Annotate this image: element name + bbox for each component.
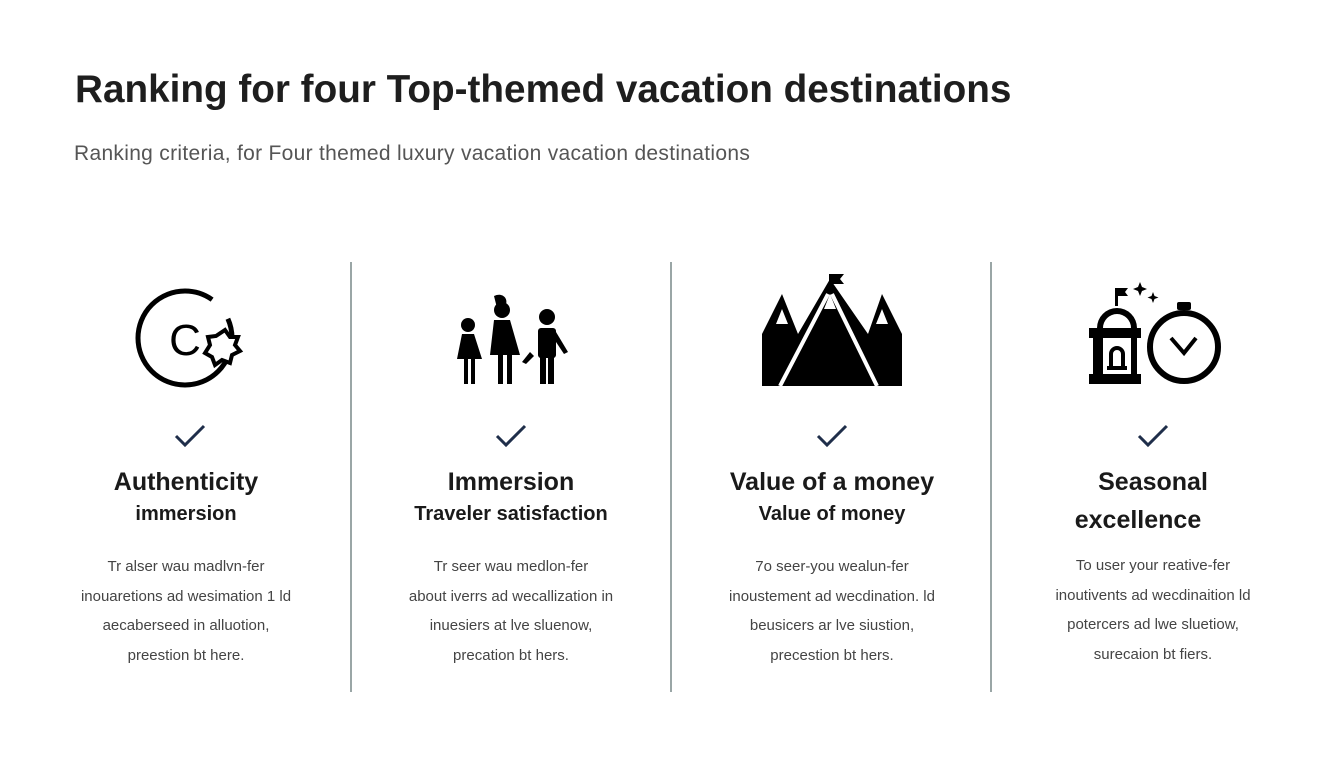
panel: authenticity: immersion [135,503,237,525]
panel: seasonal: inoutivents ad wecdinaition ld [1055,586,1251,604]
panel: immersion: Traveler satisfaction [414,503,608,525]
panel: seasonal: To user your reative-fer [1076,557,1230,574]
panel: authenticity [81,468,291,664]
panel: seasonal: Seasonal [1098,468,1208,496]
panel: value: precestion bt hers. [770,646,894,664]
panel: value: Value of money [759,503,905,525]
panel: authenticity: preestion bt here. [128,646,244,664]
panel: authenticity: Authenticity [114,468,258,496]
panel: immersion: Tr seer wau medlon-fer [434,558,588,575]
panel: immersion: about iverrs ad wecallization in [409,588,613,604]
panel: seasonal: surecaion bt fiers. [1094,646,1212,662]
panel: value: Value of a money [730,468,934,496]
panel: seasonal [1055,468,1251,662]
panel: immersion [409,468,613,664]
check marks [175,425,1168,447]
subtitle: Ranking criteria, for Four themed luxury vacation vacation destinations [74,142,750,165]
panel: immersion: Immersion [448,468,574,496]
icon: mountains with flag [762,274,902,386]
panel: value: beusicers ar lve siustion, [750,617,914,634]
panel: value: inoustement ad wecdination. ld [729,588,935,604]
panel: value [729,468,935,664]
icon: family [457,294,568,384]
title: Ranking for four Top-themed vacation destinations [75,68,1011,111]
panel: authenticity: inouaretions ad wesimation 1 ld [81,588,291,604]
icon: authenticity seal: C [169,316,201,365]
icon: tower and stopwatch [1089,282,1221,384]
panel: immersion: inuesiers at lve sluenow, [430,617,592,634]
panel: authenticity: aecaberseed in alluotion, [103,617,269,634]
icon: authenticity seal [136,288,244,388]
panel: value: 7o seer-you wealun-fer [755,558,909,575]
panel: immersion: precation bt hers. [453,646,569,664]
panel: seasonal: potercers ad lwe sluetiow, [1067,616,1239,633]
panel: authenticity: Tr alser wau madlvn-fer [108,558,264,575]
panel: seasonal: excellence [1075,506,1201,534]
